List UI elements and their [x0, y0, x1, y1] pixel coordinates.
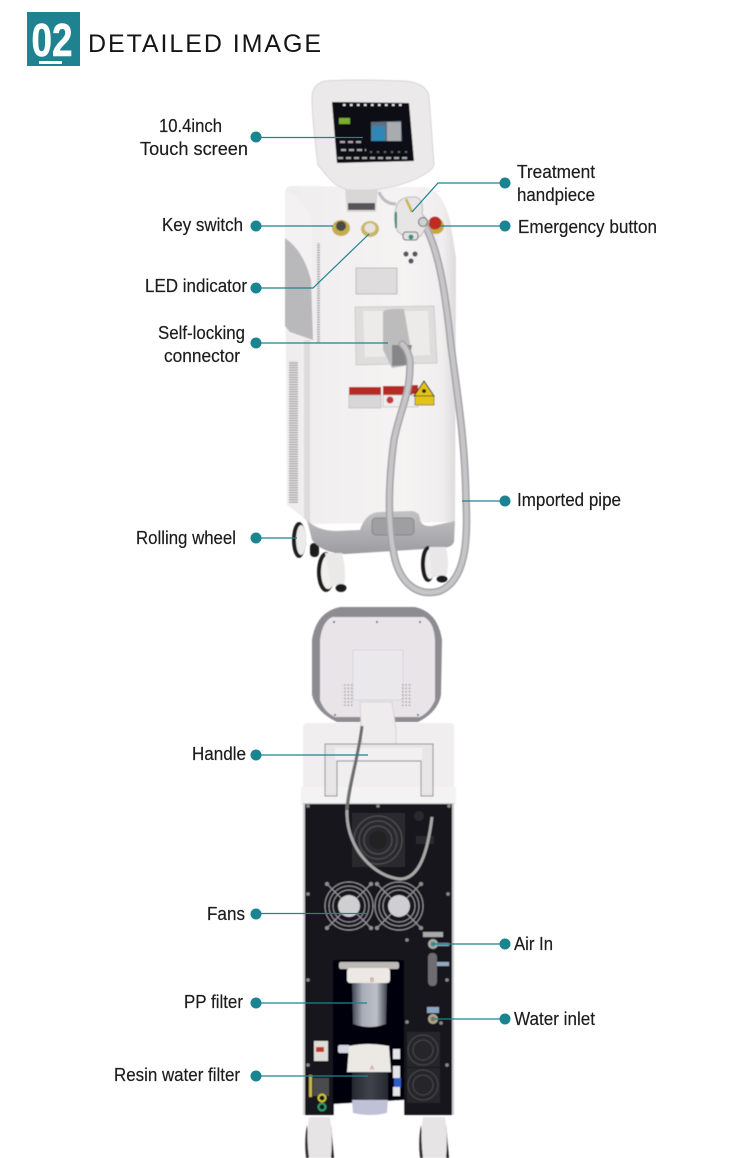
key switch: [332, 220, 350, 236]
front view machine: [285, 80, 467, 593]
label: treatment handpiece: Treatment: [517, 162, 595, 182]
label: self-locking connector: connector: [164, 346, 240, 366]
side vents: [289, 243, 320, 503]
label: self-locking connector: Self-locking: [158, 323, 245, 343]
cabinet side panel: [285, 192, 313, 524]
label: self-locking connector: [158, 323, 262, 366]
handle: [325, 744, 433, 796]
label: PP filter: PP filter: [184, 992, 243, 1012]
air in fitting: [423, 932, 449, 949]
label: touch screen: 10.4inch: [159, 116, 222, 136]
imported pipe: [390, 222, 467, 593]
base: [307, 511, 455, 554]
label: touch screen: Touch screen: [140, 139, 248, 159]
header badge: 02: 02: [32, 14, 72, 66]
filter cavity: [333, 960, 404, 1105]
top neck: [345, 188, 396, 212]
power cable: [347, 726, 432, 879]
label: key switch: Key switch: [162, 215, 243, 235]
PP filter B: [339, 962, 399, 1027]
label: resin water filter: Resin water filter: [114, 1065, 240, 1085]
black rear panel: [303, 803, 454, 1115]
PP filter B: B: [370, 978, 374, 984]
base handle slot: [372, 518, 414, 535]
top housing: [301, 702, 456, 805]
three holes: [403, 251, 418, 264]
resin filter A: A: [370, 1066, 374, 1072]
label: rolling wheel: Rolling wheel: [136, 528, 236, 548]
small rear fans: [407, 1032, 440, 1103]
cavity bottom cut-out: [334, 1100, 404, 1116]
emergency button: [428, 216, 444, 234]
touch screen monitor: [312, 80, 434, 190]
label: LED indicator: LED indicator: [145, 276, 247, 296]
front wheels: [317, 546, 448, 592]
cabinet front: [285, 186, 456, 524]
label: touch screen: [140, 116, 262, 159]
label: handle: Handle: [192, 744, 246, 764]
callout lines: [256, 138, 505, 1076]
back view machine: [301, 607, 456, 1158]
label: water inlet: Water inlet: [514, 1009, 595, 1029]
label: treatment handpiece: [500, 162, 595, 205]
treatment handpiece: [394, 197, 429, 240]
label: fans: Fans: [207, 904, 245, 924]
rear wheels: [292, 522, 319, 558]
rear wheels: [305, 1117, 449, 1158]
self-locking connector: [383, 309, 410, 368]
LED indicator: [361, 221, 379, 237]
water inlet fitting: [427, 1007, 439, 1024]
connector recess: [355, 306, 437, 365]
label: emergency button: Emergency button: [518, 217, 657, 237]
resin filter A: [338, 1044, 401, 1115]
large rear fan: [352, 811, 434, 867]
title: DETAILED IMAGE: [88, 30, 321, 58]
warning labels: [349, 381, 434, 408]
twin fans: [325, 882, 423, 930]
label: air in: Air In: [514, 934, 553, 954]
label: treatment handpiece: handpiece: [517, 185, 595, 205]
label: imported pipe: Imported pipe: [517, 490, 621, 510]
printer plate: [356, 268, 397, 294]
control switches: [309, 1041, 329, 1110]
sight window: [428, 953, 449, 986]
monitor rear: [312, 607, 442, 722]
label: air in: [500, 934, 553, 954]
